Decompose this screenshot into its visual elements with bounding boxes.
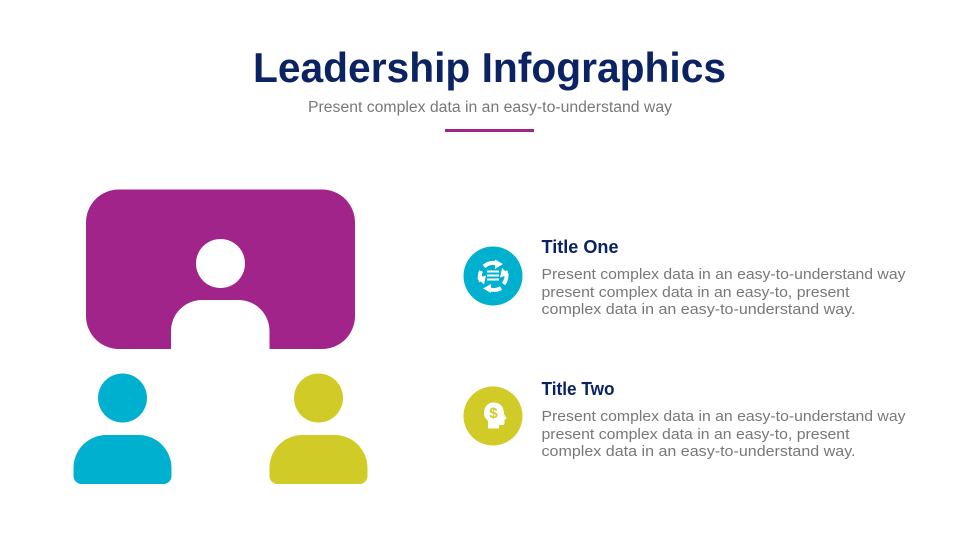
icon: cyan team member bbox=[74, 374, 172, 484]
text block: title two: Title Two bbox=[542, 379, 614, 399]
text block: title one: complex data in an easy-to-understand way. bbox=[542, 301, 856, 318]
icon: head with dollar sign: $ bbox=[489, 405, 498, 422]
text block: title two: Present complex data in an easy-to-understand way bbox=[542, 408, 906, 425]
leader head bbox=[196, 239, 245, 288]
text block: title one: Present complex data in an easy-to-understand way bbox=[542, 266, 906, 283]
text block: title two: present complex data in an easy-to, present bbox=[542, 426, 850, 443]
text block: title one bbox=[542, 237, 906, 318]
text block: title one: Title One bbox=[542, 237, 618, 257]
text block: title two: complex data in an easy-to-understand way. bbox=[542, 443, 856, 460]
panel: leader presentation screen bbox=[86, 190, 355, 349]
purple screen with leader silhouette cut out bbox=[86, 190, 355, 349]
title: Leadership Infographics bbox=[253, 44, 726, 91]
text block: title two bbox=[542, 379, 906, 460]
title underline accent bbox=[445, 129, 534, 132]
icon: olive team member bbox=[270, 374, 368, 484]
icon: cycle with list bbox=[464, 246, 522, 306]
subtitle: Present complex data in an easy-to-understand way bbox=[308, 99, 672, 116]
text block: title one: present complex data in an easy-to, present bbox=[542, 284, 850, 301]
icon: head with dollar sign bbox=[464, 386, 522, 446]
